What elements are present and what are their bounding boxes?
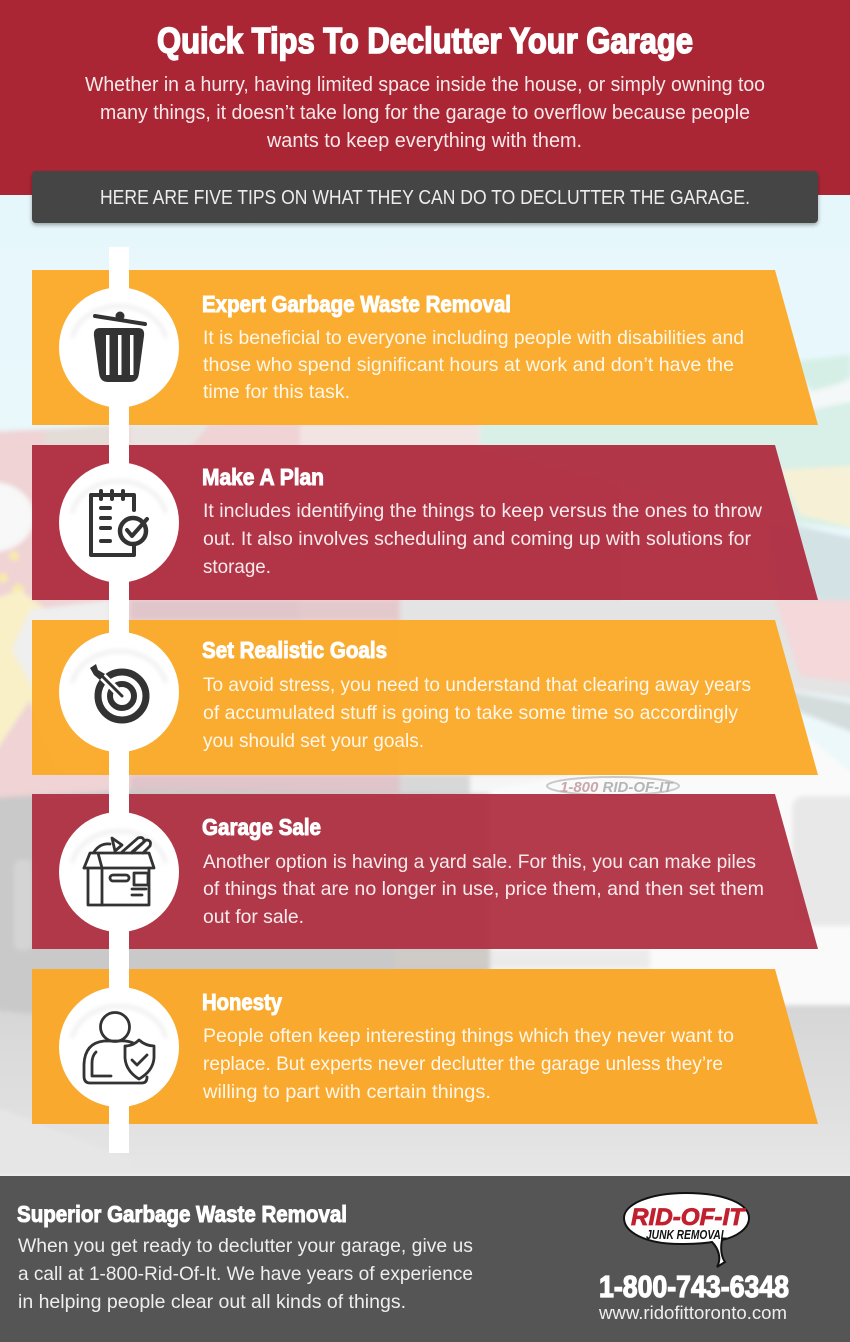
van side (490, 730, 850, 1005)
ground (0, 1005, 850, 1176)
tip 2 text (202, 464, 763, 578)
tip 3 text: you should set your goals. (203, 730, 424, 752)
footer paragraph: When you get ready to declutter your garage, give us (18, 1235, 473, 1257)
tip 2 icon: checklist (59, 462, 179, 582)
tip 1 text: those who spend significant hours at work and don’t have the (203, 354, 734, 376)
timeline vertical bar (109, 247, 129, 1153)
headlight (792, 796, 850, 926)
tip 4 text (202, 814, 764, 928)
tip 1 text: time for this task. (203, 381, 350, 403)
tip 4 icon: box of items (59, 812, 179, 932)
tip 3 text (202, 637, 751, 752)
tip 4 text: Garage Sale (202, 814, 321, 840)
tip 4 text: of things that are no longer in use, price them, and then set them (203, 878, 764, 900)
tip 5 text: People often keep interesting things which they never want to (203, 1025, 734, 1047)
tip 5 band (32, 969, 818, 1124)
dark underbody (0, 790, 490, 1060)
tip 1 icon: trash can (59, 288, 179, 408)
footer paragraph: in helping people clear out all kinds of things. (18, 1291, 406, 1313)
van logo lettering: 1-800 RID-OF-IT (560, 779, 674, 796)
footer heading: Superior Garbage Waste Removal (17, 1201, 347, 1227)
footer paragraph: a call at 1-800-Rid-Of-It. We have years of experience (18, 1263, 473, 1285)
footer panel (0, 1176, 850, 1342)
logo: speech bubble (624, 1193, 749, 1267)
tip 1 text: Expert Garbage Waste Removal (202, 291, 511, 317)
tip 4 text: out for sale. (203, 906, 304, 928)
tip 2 text: storage. (203, 556, 271, 578)
header panel (0, 0, 850, 195)
tip 5 text: Honesty (202, 989, 282, 1015)
phone number: 1-800-743-6348 (599, 1269, 789, 1304)
tip 5 text: replace. But experts never declutter the garage unless they’re (203, 1053, 723, 1075)
tip 1 text: It is beneficial to everyone including people with disabilities and (203, 327, 744, 349)
background photo: mural and van (0, 195, 850, 1176)
intro paragraph (85, 74, 765, 152)
tip 3 text: of accumulated stuff is going to take some time so accordingly (203, 702, 738, 724)
tip 5 text: willing to part with certain things. (202, 1081, 491, 1103)
tip 2 text: It includes identifying the things to keep versus the ones to throw (203, 500, 763, 522)
website: www.ridofittoronto.com (598, 1303, 787, 1323)
footer paragraph (18, 1235, 473, 1313)
logo: speech bubble: JUNK REMOVAL (646, 1227, 727, 1242)
tip 1 band (32, 270, 818, 425)
tip 4 text: Another option is having a yard sale. For this, you can make piles (203, 851, 756, 873)
intro paragraph: wants to keep everything with them. (266, 130, 582, 152)
tip 3 text: To avoid stress, you need to understand that clearing away years (203, 674, 751, 696)
white speech bubble on mural (0, 482, 34, 552)
tip 3 icon: target with arrow (59, 632, 179, 752)
subheading bar (32, 171, 818, 223)
tip 1 text (202, 291, 744, 403)
tip 3 text: Set Realistic Goals (202, 637, 387, 663)
logo: speech bubble: RID-OF-IT (631, 1204, 746, 1231)
tip 4 band (32, 794, 818, 949)
intro paragraph: many things, it doesn’t take long for the garage to overflow because people (100, 102, 750, 124)
title: Quick Tips To Declutter Your Garage (157, 20, 693, 61)
tip 3 band (32, 620, 818, 775)
tip 5 icon: person with shield (59, 987, 179, 1107)
tip 2 text: out. It also involves scheduling and coming up with solutions for (203, 528, 751, 550)
subheading bar: HERE ARE FIVE TIPS ON WHAT THEY CAN DO TO DECLUTTER THE GARAGE. (100, 187, 750, 209)
tip 2 band (32, 445, 818, 600)
tip 2 text: Make A Plan (202, 464, 324, 490)
intro paragraph: Whether in a hurry, having limited space inside the house, or simply owning too (85, 74, 765, 96)
mural wall, upper left (0, 425, 402, 800)
tip 5 text (202, 989, 734, 1103)
yellow dots (0, 551, 24, 596)
